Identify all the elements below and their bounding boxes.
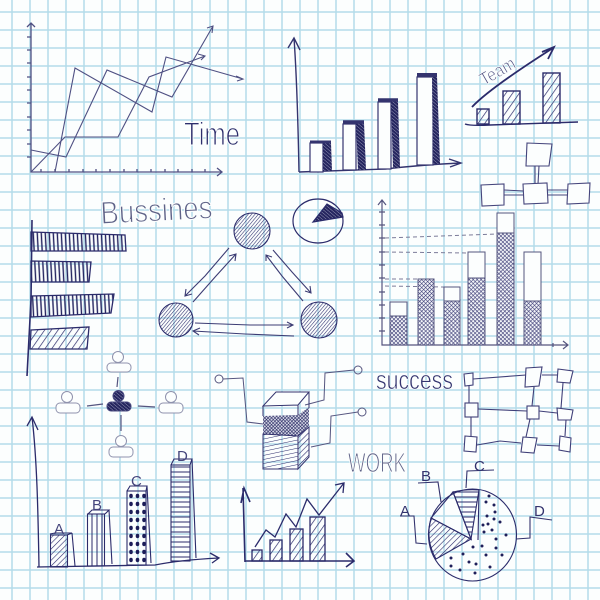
top box bbox=[526, 143, 552, 166]
trend line three bbox=[31, 26, 213, 157]
chart axes bbox=[27, 23, 222, 176]
cube diagram bbox=[215, 366, 366, 469]
connectors bbox=[504, 166, 568, 195]
centre box bbox=[523, 183, 548, 204]
divider line bbox=[478, 490, 479, 540]
building A bbox=[50, 533, 75, 567]
column four bbox=[417, 75, 440, 165]
building B bbox=[88, 510, 112, 566]
bar one bbox=[252, 550, 262, 561]
dark wedge bbox=[313, 204, 343, 222]
pie letters bbox=[400, 458, 545, 520]
trend line one bbox=[31, 54, 205, 172]
dots segment D bbox=[450, 494, 508, 574]
node top bbox=[234, 213, 270, 249]
letter B: B bbox=[92, 497, 102, 514]
people network bbox=[56, 352, 183, 457]
leader lines bbox=[215, 366, 366, 447]
column three bbox=[444, 287, 460, 345]
cube lower side bbox=[298, 427, 309, 469]
box row one bbox=[464, 367, 573, 387]
rising zigzag arrow bbox=[255, 483, 344, 547]
person centre bbox=[107, 390, 131, 411]
chart axes bbox=[288, 38, 461, 172]
line chart: time bbox=[27, 23, 243, 176]
connectors bbox=[469, 375, 566, 446]
vertical axis bbox=[27, 220, 32, 376]
letter A: A bbox=[54, 521, 64, 538]
bar two bbox=[270, 540, 282, 561]
bar medium bbox=[503, 91, 520, 124]
building bar chart bbox=[27, 417, 219, 567]
bar tall bbox=[543, 73, 560, 123]
bar four bbox=[30, 327, 89, 349]
chart axes bbox=[378, 200, 568, 349]
wedge A bbox=[429, 518, 471, 559]
letter C: C bbox=[131, 473, 142, 490]
letter D: D bbox=[177, 448, 188, 465]
letter D: D bbox=[534, 503, 545, 520]
bar two bbox=[31, 261, 91, 282]
column two bbox=[418, 279, 434, 345]
chart axes bbox=[27, 417, 219, 567]
pie chart: small wedge bbox=[293, 199, 343, 243]
letter B: B bbox=[421, 468, 431, 485]
pie leader lines bbox=[400, 470, 552, 544]
heading: success: success bbox=[376, 365, 453, 395]
node left bbox=[159, 303, 193, 337]
column one bbox=[390, 302, 407, 345]
column five bbox=[497, 213, 514, 345]
segmented pie chart bbox=[400, 470, 552, 581]
dashed guides bbox=[385, 234, 497, 287]
arrows between nodes bbox=[185, 248, 311, 336]
node right bbox=[301, 302, 337, 338]
horizontal bar chart bbox=[27, 220, 126, 376]
flow diagram: four boxes bbox=[481, 143, 590, 206]
box row two bbox=[465, 403, 573, 420]
wedge B bbox=[431, 492, 471, 539]
wedge C bbox=[453, 490, 479, 539]
person top bbox=[107, 352, 131, 372]
column one bbox=[310, 142, 332, 172]
building D bbox=[171, 459, 196, 561]
right box bbox=[567, 183, 590, 204]
heading: WORK: WORK bbox=[348, 447, 406, 478]
bar one bbox=[31, 232, 126, 251]
cube lower front bbox=[263, 434, 298, 469]
box row three bbox=[464, 436, 571, 453]
label: Team: Team bbox=[476, 53, 519, 89]
letter C: C bbox=[474, 458, 485, 475]
person right bbox=[159, 392, 183, 413]
chart axes bbox=[241, 488, 354, 567]
bar chart: four white columns bbox=[288, 38, 461, 172]
bar three bbox=[290, 529, 303, 561]
heading: Bussines: Bussines bbox=[99, 189, 213, 231]
cube dark band bbox=[263, 407, 309, 436]
person left bbox=[56, 392, 80, 413]
baseline bbox=[465, 122, 578, 125]
trend line two bbox=[55, 57, 243, 172]
rising arrow bbox=[472, 47, 554, 107]
bar small bbox=[477, 109, 489, 124]
column three bbox=[378, 100, 400, 169]
stacked bar chart bbox=[378, 200, 568, 349]
label: Time: Time bbox=[184, 116, 240, 152]
building C bbox=[127, 486, 151, 565]
bar four bbox=[310, 517, 325, 561]
pie outline bbox=[428, 489, 516, 581]
connectors bbox=[87, 377, 155, 431]
letter A: A bbox=[400, 503, 410, 520]
cycle diagram: three nodes bbox=[159, 213, 337, 338]
column six bbox=[524, 252, 541, 345]
small bar chart with rising arrow bbox=[241, 483, 354, 567]
bar three bbox=[31, 294, 114, 317]
left box bbox=[481, 184, 504, 206]
building letters bbox=[54, 448, 188, 538]
column two bbox=[343, 122, 366, 170]
bar chart: team growth bbox=[465, 47, 578, 125]
column four bbox=[468, 252, 485, 345]
network grid of nine boxes bbox=[464, 367, 573, 453]
cube top bbox=[263, 392, 309, 416]
pie outline bbox=[293, 199, 343, 243]
person bottom bbox=[109, 436, 133, 457]
